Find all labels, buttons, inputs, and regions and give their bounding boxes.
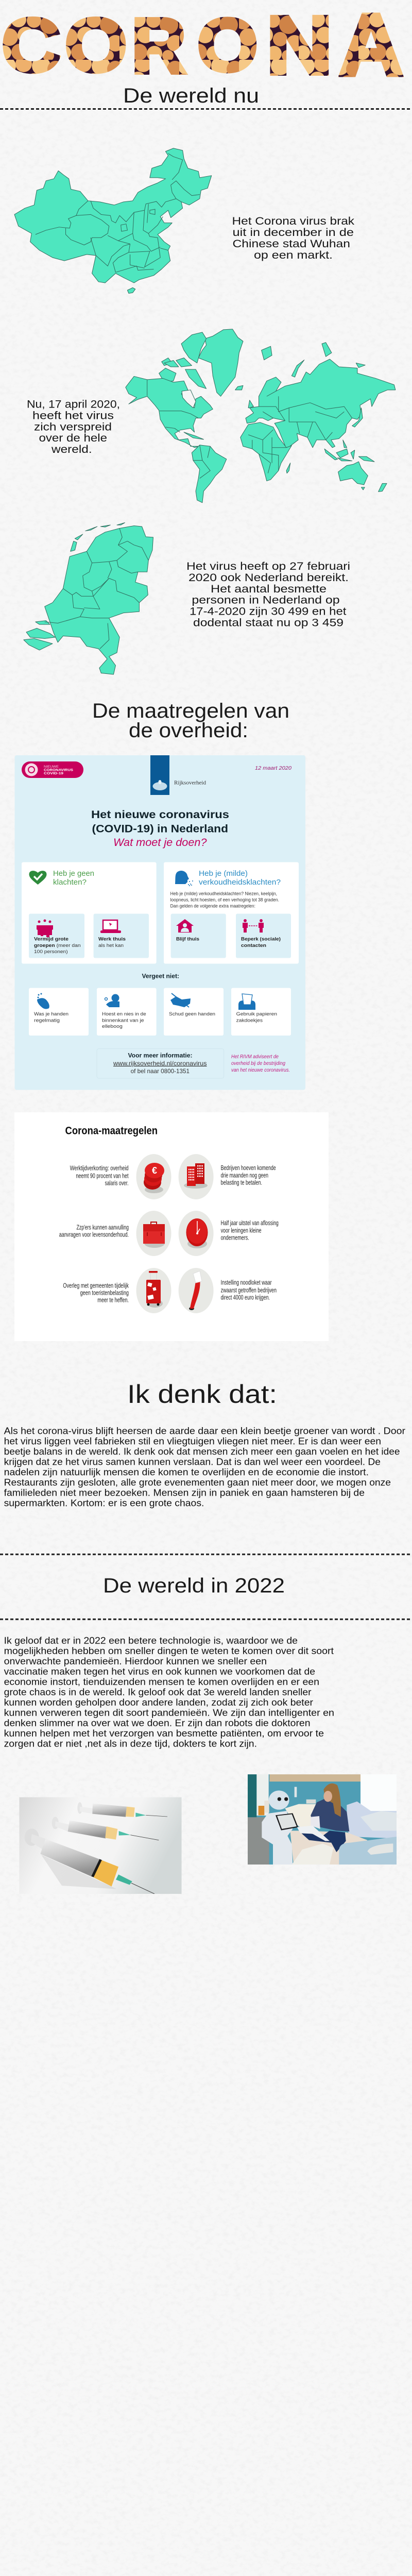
row 1 right text: Bedrijven hoeven komende <box>221 1164 276 1172</box>
text block: De wereld in 2022: zorgen dat er niet ,net als in deze tijd, dokters te kort zijn. <box>4 1739 257 1749</box>
poster title: Wat moet je doen? <box>113 837 207 849</box>
text: Netherlands: 17-4-2020 zijn 30 499 en het <box>190 606 347 618</box>
text block: Ik denk dat: Restaurants zijn gesloten, alle grote evenementen gaan niet meer door, we mogen onze <box>4 1477 391 1487</box>
row 1 left text: salaris over. <box>105 1179 129 1187</box>
card: papieren zakdoekjes: zakdoekjes <box>236 1018 263 1023</box>
text: Netherlands: dodental staat nu op 3 459 <box>193 617 344 629</box>
card: hoest en nies: binnenkant van je <box>102 1018 144 1023</box>
icon: office buildings <box>179 1154 214 1199</box>
box: meer informatie <box>97 1049 224 1078</box>
card: geen klachten <box>22 862 157 963</box>
card: was je handen: regelmatig <box>34 1018 60 1023</box>
text block: De wereld in 2022: Ik geloof dat er in 2022 een betere technologie is, waardoor we de <box>4 1636 298 1646</box>
note: RIVM: van het nieuwe coronavirus. <box>231 1067 290 1073</box>
tile: vermijd grote groepen: 100 personen) <box>34 949 68 954</box>
row 3 right text: zwaarst getroffen bedrijven <box>221 1286 277 1294</box>
card: schud geen handen <box>164 988 224 1036</box>
row 3 left text <box>63 1281 129 1304</box>
tile: vermijd grote groepen: Vermijd grote <box>34 937 68 942</box>
box: meer informatie: Voor meer informatie: <box>128 1052 193 1059</box>
title: CORONA in wood texture: C <box>2 3 60 87</box>
badge: nieuwe coronavirus <box>22 761 83 778</box>
tile: beperk sociale contacten: contacten <box>241 943 266 948</box>
note: RIVM: overheid bij de bestrijding <box>231 1060 285 1066</box>
panel: government poster <box>14 755 305 1090</box>
photo: syringes <box>19 1797 182 1894</box>
text block: Ik denk dat: Als het corona-virus blijft heersen de aarde daar een klein beetje groener van wordt . Door <box>4 1426 405 1436</box>
text block: Ik denk dat: krijgen dat ze het virus samen kunnen verslaan. Dat is dan wel weer een voordeel. De <box>4 1456 381 1467</box>
title: CORONA in wood texture <box>2 0 403 94</box>
card: schud geen handen: Schud geen handen <box>169 1011 215 1016</box>
card: verkoudheidsklachten: Dan gelden de volgende extra maatregelen: <box>170 904 255 909</box>
row 2 right text: voor leningen kleine <box>221 1226 262 1234</box>
icon: raised hand with paper <box>179 1268 214 1313</box>
card: was je handen: Was je handen <box>34 1011 68 1016</box>
text block: Ik denk dat: nadelen zijn natuurlijk mensen die komen te overlijden en de economie die instort. <box>4 1467 369 1477</box>
row 2 right text: Half jaar uitstel van aflossing <box>221 1219 279 1227</box>
icon: euro coins: € <box>152 1165 157 1176</box>
date: 12 maart 2020 <box>255 766 291 771</box>
card: verkoudheidsklachten: verkoudheidsklachten? <box>199 878 281 887</box>
tile: vermijd grote groepen: groepen (meer dan <box>34 943 81 948</box>
heading: De maatregelen van de overheid: De maatregelen van <box>92 700 289 722</box>
text: China: Chinese stad Wuhan <box>233 238 350 250</box>
badge: nieuwe coronavirus: CORONAVIRUS <box>44 769 74 772</box>
text: world: over de hele <box>39 432 107 444</box>
row 1 left text: Werktijdverkorting: overheid <box>70 1164 129 1172</box>
card: verkoudheidsklachten: Heb je (milde) <box>199 869 248 878</box>
note: RIVM: Het RIVM adviseert de <box>231 1054 279 1060</box>
icon: sneezing head <box>175 871 193 886</box>
row 2 left text <box>59 1223 129 1239</box>
tile: blijf thuis: Blijf thuis <box>176 937 199 942</box>
card: was je handen <box>29 988 89 1036</box>
icon: suitcase <box>136 1268 171 1313</box>
row 2 right text <box>221 1219 279 1242</box>
text: world <box>27 399 120 455</box>
tile: werk thuis: Werk thuis <box>98 937 126 942</box>
row 3 left text: meer te heffen. <box>97 1296 129 1304</box>
label: vergeet niet: Vergeet niet: <box>142 972 179 979</box>
text block: De wereld in 2022 <box>4 1636 334 1749</box>
text block: De wereld in 2022: grote chaos is in de wereld. Ik geloof ook dat 3e wereld landen sneller <box>4 1687 312 1698</box>
logo: Rijksoverheid: Rijksoverheid <box>174 781 206 786</box>
row 1 right text: drie maanden nog geen <box>221 1171 268 1179</box>
note: RIVM <box>231 1054 290 1073</box>
badge: nieuwe coronavirus: NIEUWE <box>44 766 59 769</box>
poster title <box>91 809 229 849</box>
card: verkoudheidsklachten <box>164 862 299 963</box>
text: Netherlands: 2020 ook Nederland bereikt. <box>188 572 349 584</box>
row 1 right text: belasting te betalen. <box>221 1179 262 1187</box>
badge: nieuwe coronavirus: COVID-19 <box>44 772 63 775</box>
icon: briefcase <box>136 1211 171 1256</box>
row 3 right text: Instelling noodloket waar <box>221 1279 272 1286</box>
text: China: Het Corona virus brak <box>232 215 355 227</box>
icon: euro coins <box>136 1154 171 1199</box>
text: Netherlands: Het aantal besmette <box>211 583 327 595</box>
box: meer informatie: www.rijksoverheid.nl/coronavirus <box>113 1060 207 1067</box>
card: verkoudheidsklachten: Heb je (milde) verkoudheidsklachten? Niezen, keelpijn, <box>170 891 277 896</box>
title: CORONA in wood texture: O <box>197 4 258 87</box>
row 2 left text: aanvragen voor levensonderhoud. <box>59 1231 129 1239</box>
row 1 left text <box>70 1164 129 1187</box>
text: world: wereld. <box>51 444 92 455</box>
text block: De wereld in 2022: denken slimmer na over wat we doen. Er zijn dan robots die doktoren <box>4 1718 311 1728</box>
text block: De wereld in 2022: kunnen verweren tegen dit soort pandemieën. We zijn dan intelligenter en <box>4 1708 334 1718</box>
box: meer informatie: of bel naar 0800-1351 <box>131 1067 190 1075</box>
row 1 right text <box>221 1164 276 1187</box>
text block: Ik denk dat <box>4 1426 405 1508</box>
row 3 left text: Overleg met gemeenten tijdelijk <box>63 1281 129 1289</box>
tile: beperk sociale contacten <box>236 914 291 958</box>
text: Netherlands <box>186 561 350 629</box>
card: hoest en nies: elleboog <box>102 1024 123 1029</box>
text block: De wereld in 2022: mogelijkheden hebben om sneller dingen te weten te komen over dit soort <box>4 1646 334 1656</box>
row 1 left text: neemt 90 procent van het <box>76 1172 129 1179</box>
row 3 left text: geen toeristenbelasting <box>80 1289 129 1297</box>
tile: blijf thuis <box>171 914 226 958</box>
text: China: uit in december in de <box>233 227 354 239</box>
panel title: Corona-maatregelen <box>65 1125 158 1137</box>
text block: De wereld in 2022: kunnen worden geholpen door andere landen, zodat zij zich ook beter <box>4 1698 313 1708</box>
panel: corona-maatregelen <box>14 1112 329 1341</box>
map: Netherlands <box>24 523 153 674</box>
card: hoest en nies: Hoest en nies in de <box>102 1011 146 1016</box>
text block: De wereld in 2022: kunnen helpen met het verzorgen van besmette patiënten, om ervoor te <box>4 1728 324 1739</box>
text: world: heeft het virus <box>32 410 114 421</box>
heading: De wereld in 2022: De wereld in 2022 <box>103 1574 285 1597</box>
text block: Ik denk dat: supermarkten. Kortom: er is een grote chaos. <box>4 1498 204 1508</box>
card: papieren zakdoekjes: Gebruik papieren <box>236 1011 277 1016</box>
title: CORONA in wood texture: R <box>131 2 186 89</box>
heading: De maatregelen van de overheid: de overheid: <box>129 719 248 742</box>
text block: Ik denk dat: familieleden niet meer bezoeken. Mensen zijn in paniek en gaan hamsteren bij de <box>4 1487 365 1498</box>
tile: werk thuis <box>94 914 149 958</box>
row 2 right text: ondernemers. <box>221 1234 249 1242</box>
icon: clock <box>179 1211 214 1256</box>
tile: beperk sociale contacten: Beperk (sociale) <box>241 937 281 942</box>
text: Netherlands: personen in Nederland op <box>192 595 340 606</box>
card: hoest en nies <box>97 988 157 1036</box>
text: China: op een markt. <box>254 249 333 261</box>
heading: De maatregelen van de overheid <box>92 700 289 742</box>
text: world: Nu, 17 april 2020, <box>27 399 120 411</box>
text: China <box>232 215 355 261</box>
map: world <box>126 329 396 503</box>
poster title: Het nieuwe coronavirus <box>91 809 229 821</box>
text block: De wereld in 2022: onverwachte pandemieën. Hierdoor kunnen we sneller een <box>4 1656 267 1667</box>
text block: Ik denk dat: beetje balans in de wereld. Ik denk ook dat mensen zich meer een gaan voelen en het idee <box>4 1446 400 1456</box>
poster title: (COVID-19) in Nederland <box>92 823 228 835</box>
card: geen klachten: Heb je geen <box>53 869 94 878</box>
text: world: zich verspreid <box>34 421 112 433</box>
heading: De wereld nu: De wereld nu <box>123 84 259 107</box>
text block: De wereld in 2022: vaccinatie maken tegen het virus en ook kunnen we voorkomen dat de <box>4 1667 315 1677</box>
title: CORONA in wood texture: N <box>266 0 333 91</box>
row 3 right text <box>221 1279 277 1301</box>
title: CORONA in wood texture: O <box>65 3 127 87</box>
card: papieren zakdoekjes <box>231 988 291 1036</box>
card: verkoudheidsklachten: loopneus, licht hoesten, of een verhoging tot 38 graden. <box>170 897 279 902</box>
logo: Rijksoverheid <box>150 755 206 795</box>
text: Netherlands: Het virus heeft op 27 februari <box>186 561 350 572</box>
row 2 left text: Zzp'ers kunnen aanvulling <box>76 1223 129 1231</box>
heading: Ik denk dat: Ik denk dat: <box>127 1380 277 1409</box>
map: China <box>14 148 212 293</box>
tile: werk thuis: als het kan <box>98 943 124 948</box>
row 3 right text: direct 4000 euro krijgen. <box>221 1293 270 1301</box>
text block: Ik denk dat: het virus liggen veel fabrieken stil en vliegtuigen vliegen niet meer. Er is dan weer een <box>4 1436 381 1446</box>
card: geen klachten: klachten? <box>53 878 87 887</box>
tile: vermijd grote groepen <box>29 914 84 958</box>
photo: robot in hospital <box>248 1774 397 1865</box>
icon: green heart <box>29 871 46 885</box>
text block: De wereld in 2022: economie instort, tienduizenden mensen te komen overlijden en er een <box>4 1677 319 1687</box>
